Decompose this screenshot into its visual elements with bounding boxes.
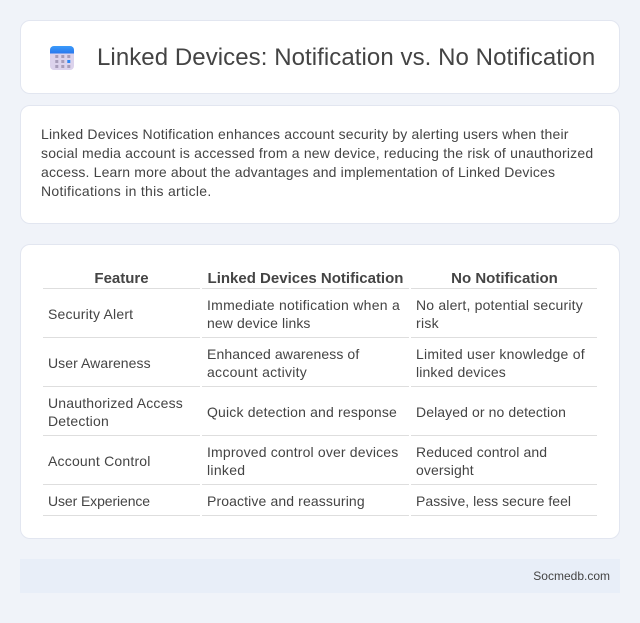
row: security alert: risk xyxy=(416,315,439,331)
row: user awareness: User Awareness xyxy=(48,355,151,371)
description text xyxy=(41,126,593,199)
row: security alert: new device links xyxy=(207,315,311,331)
row: security alert xyxy=(43,297,597,338)
row: user experience xyxy=(43,493,597,516)
description text: access. Learn more about the advantages and implementation of Linked Devices xyxy=(41,164,555,180)
panel: header xyxy=(20,20,620,94)
table header row xyxy=(43,270,597,289)
row: account control xyxy=(43,444,597,485)
table header row: Linked Devices Notification xyxy=(208,270,403,286)
table header row: Feature xyxy=(94,270,149,286)
row: unauthorized access detection: Unauthorized Access xyxy=(48,395,183,411)
description text: Linked Devices Notification enhances account security by alerting users when their xyxy=(41,126,569,142)
row: account control: Improved control over devices xyxy=(207,444,398,460)
panel: description xyxy=(20,105,620,224)
description text: Notifications in this article. xyxy=(41,183,212,199)
row: security alert: No alert, potential security xyxy=(416,297,583,313)
row: unauthorized access detection: Delayed or no detection xyxy=(416,404,566,420)
row: user awareness: linked devices xyxy=(416,364,506,380)
row: account control: oversight xyxy=(416,462,474,478)
row: user experience: User Experience xyxy=(48,493,150,509)
footer bar xyxy=(20,559,620,593)
panel: comparison table xyxy=(20,244,620,539)
row: unauthorized access detection: Quick detection and response xyxy=(207,404,397,420)
description text: social media account is accessed from a new device, reducing the risk of unauthorized xyxy=(41,145,593,161)
row: user awareness: account activity xyxy=(207,364,307,380)
row: user experience: Passive, less secure feel xyxy=(416,493,571,509)
row: user awareness: Enhanced awareness of xyxy=(207,346,359,362)
icon: calendar xyxy=(50,46,74,70)
row: user awareness: Limited user knowledge of xyxy=(416,346,585,362)
row: user experience: Proactive and reassuring xyxy=(207,493,365,509)
row: account control: Reduced control and xyxy=(416,444,547,460)
row: user awareness xyxy=(43,346,597,387)
table header row: No Notification xyxy=(451,270,558,286)
row: account control: Account Control xyxy=(48,453,151,469)
row: security alert: Immediate notification when a xyxy=(207,297,400,313)
row: account control: linked xyxy=(207,462,245,478)
title: Linked Devices: Notification vs. No Notification xyxy=(97,44,595,71)
footer credit: Socmedb.com xyxy=(533,569,610,583)
row: security alert: Security Alert xyxy=(48,306,133,322)
row: unauthorized access detection xyxy=(43,395,597,436)
row: unauthorized access detection: Detection xyxy=(48,413,109,429)
